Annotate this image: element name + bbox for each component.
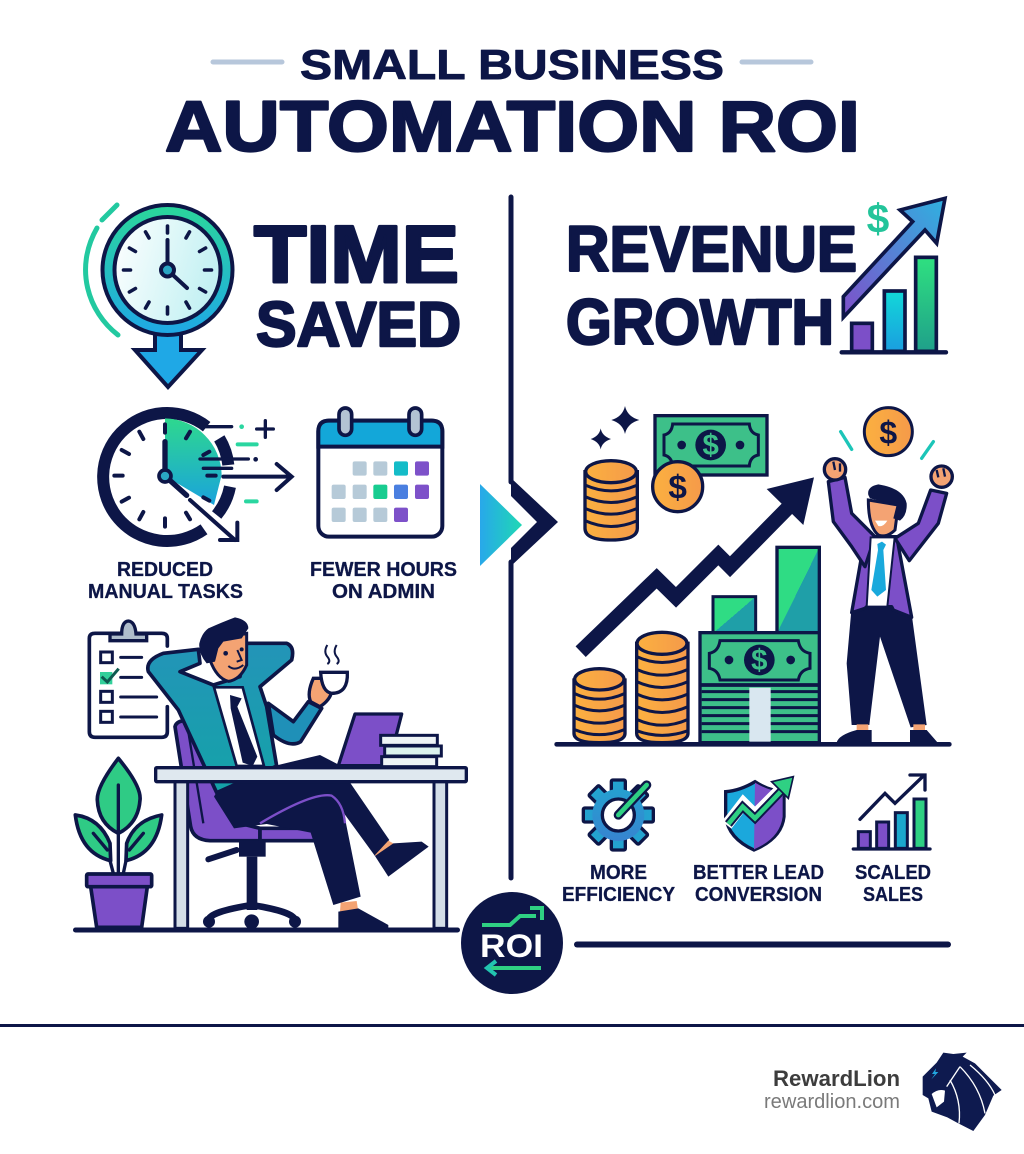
heading: time saved: TIME bbox=[254, 210, 459, 300]
office chair bbox=[175, 721, 317, 929]
celebrating man bbox=[824, 408, 952, 743]
gold coin bbox=[653, 462, 703, 512]
celebrating man: $ bbox=[879, 414, 897, 450]
caption: better lead conversion: CONVERSION bbox=[695, 884, 822, 906]
icon: potted plant bbox=[75, 758, 162, 927]
heading: time saved: SAVED bbox=[256, 290, 461, 360]
green bars bbox=[713, 597, 756, 633]
icon: checklist clipboard bbox=[89, 621, 167, 737]
desk bbox=[175, 780, 447, 928]
icon: shield with arrow bbox=[726, 777, 793, 850]
footer rule bbox=[0, 1024, 1024, 1027]
books bbox=[381, 735, 441, 767]
coin stack top bbox=[585, 461, 637, 540]
laptop bbox=[338, 714, 402, 766]
icon: calendar bbox=[318, 408, 442, 537]
coin stack small bbox=[574, 669, 625, 743]
icon: reduced manual tasks clock bbox=[103, 413, 292, 541]
head bbox=[210, 633, 247, 681]
teal transition triangle bbox=[480, 484, 522, 566]
title line 2: AUTOMATION ROI bbox=[165, 88, 860, 167]
businessman bbox=[148, 617, 466, 929]
far arm with coffee cup bbox=[268, 702, 322, 744]
heading: revenue growth bbox=[566, 213, 857, 358]
desk top bbox=[156, 768, 466, 782]
heading: time saved bbox=[254, 210, 461, 360]
footer brand text: RewardLion bbox=[773, 1066, 900, 1091]
ground line left bbox=[73, 928, 460, 932]
trousers bbox=[214, 755, 389, 905]
centre divider with chevron bbox=[480, 197, 558, 878]
caption: fewer hours on admin: ON ADMIN bbox=[332, 581, 435, 603]
heading: revenue growth: REVENUE bbox=[566, 213, 857, 285]
footer brand text: rewardlion.com bbox=[764, 1091, 900, 1113]
rising arrow bbox=[581, 505, 791, 652]
icon: growth arrow and bars: $ bbox=[867, 196, 890, 242]
caption: scaled sales: SALES bbox=[863, 884, 923, 906]
icon: growth arrow and bars bbox=[842, 196, 946, 352]
ROI badge: ROI bbox=[480, 928, 543, 964]
sparkles bbox=[591, 406, 639, 449]
icon: small bar chart bbox=[853, 775, 930, 849]
caption: better lead conversion: BETTER LEAD bbox=[693, 862, 824, 884]
heading: revenue growth: GROWTH bbox=[566, 286, 834, 358]
coin stack tall bbox=[637, 632, 688, 743]
illustration: relaxed businessman at desk bbox=[75, 617, 466, 929]
title bbox=[165, 41, 860, 167]
icon: gear bbox=[583, 780, 653, 850]
ground line right bbox=[557, 737, 949, 751]
caption: fewer hours on admin: FEWER HOURS bbox=[310, 559, 457, 581]
benefit icons bbox=[583, 775, 930, 850]
shirt bbox=[214, 687, 264, 766]
caption: reduced manual tasks bbox=[88, 559, 243, 603]
caption: more efficiency: MORE bbox=[590, 862, 647, 884]
tie bbox=[230, 695, 257, 766]
caption: better lead conversion bbox=[693, 862, 824, 906]
falling coin bbox=[864, 408, 912, 456]
gold coin: $ bbox=[668, 470, 687, 507]
icon: clock with down arrow bbox=[86, 205, 232, 387]
footer brand text bbox=[764, 1066, 900, 1113]
dollar bill bbox=[655, 416, 767, 475]
stacked bank notes: $ bbox=[751, 644, 767, 677]
title line 1: SMALL BUSINESS bbox=[300, 41, 724, 88]
hair bbox=[199, 617, 248, 663]
caption: more efficiency bbox=[562, 862, 676, 906]
illustration: money growth and celebrating man bbox=[557, 406, 952, 744]
dollar bill: $ bbox=[703, 429, 719, 462]
caption: reduced manual tasks: REDUCED bbox=[117, 559, 213, 581]
caption: reduced manual tasks: MANUAL TASKS bbox=[88, 581, 243, 603]
caption: scaled sales: SCALED bbox=[855, 862, 931, 884]
caption: scaled sales bbox=[855, 862, 931, 906]
icon: lion logo bbox=[923, 1053, 1002, 1131]
caption: fewer hours on admin bbox=[310, 559, 457, 603]
lower right rule bbox=[574, 942, 951, 948]
stacked bank notes bbox=[700, 633, 819, 743]
ROI badge bbox=[461, 892, 563, 994]
caption: more efficiency: EFFICIENCY bbox=[562, 884, 676, 906]
